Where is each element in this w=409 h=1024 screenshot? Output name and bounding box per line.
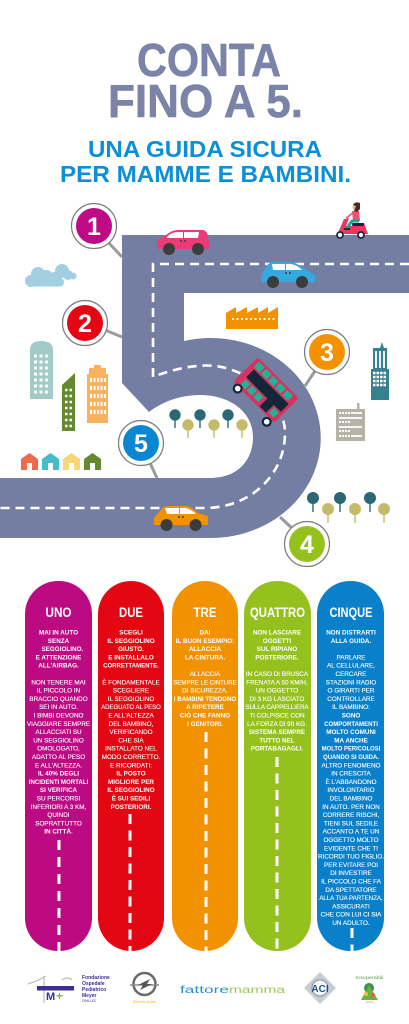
panel: cinque: AL CELLULARE, <box>327 663 375 670</box>
panel: cinque <box>317 581 384 951</box>
logo: fattoremamma: fattore <box>180 985 230 996</box>
panel: due: DEL BAMBINO, <box>109 721 154 728</box>
logo: children's charity: onlus <box>366 1000 374 1004</box>
panel: due: CHE SIA <box>118 737 144 744</box>
logo: fattoremamma <box>180 985 286 996</box>
panel: quattro: NON LASCIARE <box>253 629 302 637</box>
panel: tre: LA CINTURA. <box>185 654 225 661</box>
panel: uno: BRACCIO QUANDO <box>29 696 88 703</box>
panel: uno <box>25 581 92 951</box>
logo: fondazione meyer <box>28 975 110 1003</box>
marker 2 <box>62 300 122 346</box>
marker 5: 5 <box>134 430 148 458</box>
panel: cinque: OGGETTO MOLTO <box>323 837 379 844</box>
panel: uno: IL PICCOLO IN <box>37 687 80 695</box>
panel: quattro: FRENATA A 50 KM/H, <box>246 679 308 686</box>
panel: uno: ALLACCIATI SU <box>35 729 82 736</box>
building: teal skyscraper <box>371 342 389 400</box>
panel: quattro: IN CASO DI BRUSCA <box>246 671 309 678</box>
panel: cinque: ALTRO FENOMENO <box>322 762 380 769</box>
panel: uno: SOPRATTUTTO <box>35 820 82 827</box>
panel: uno: ADATTO AL PESO <box>32 754 85 761</box>
panel: due: VERIFICANDO <box>109 729 153 736</box>
panel: due: È FONDAMENTALE <box>102 677 160 686</box>
panel: due: POSTERIORI. <box>111 804 152 811</box>
panel: uno: OMOLOGATO, <box>37 746 80 753</box>
panel: tre: ALLACCIA <box>189 646 221 653</box>
panel: quattro: LA FORZA DI 90 KG. <box>247 721 307 728</box>
panel: quattro: TUTTO NEL <box>259 737 295 744</box>
houses <box>21 453 101 470</box>
subtitle: UNA GUIDA SICURA <box>88 136 322 162</box>
panel: quattro: POSTERIORE. <box>255 654 299 661</box>
logo: fondazione meyer: Ospedale <box>82 981 105 987</box>
title <box>108 34 303 127</box>
panel: cinque: SONO <box>342 712 360 720</box>
panel: uno: VIAGGIARE SEMPRE <box>27 721 91 728</box>
panel: uno: I BIMBI DEVONO <box>34 712 83 720</box>
panel: cinque: CINQUE <box>330 605 372 620</box>
panel: cinque: QUANDO SI GUIDA. <box>323 754 379 761</box>
subtitle: PER MAMME E BAMBINI. <box>60 161 351 187</box>
panel: due: SCEGLI <box>119 629 143 637</box>
panel: tre: A RIPETERE <box>186 704 225 711</box>
building: grey office <box>336 403 365 441</box>
panel: uno: ALL'AIRBAG. <box>38 663 79 670</box>
panel: uno: SU PERCORSI <box>37 795 80 803</box>
panel: cinque: DA SPETTATORE <box>325 887 377 894</box>
panel: cinque: DEL BAMBINO <box>330 795 372 803</box>
panel: due: CORRETTAMENTE. <box>103 663 159 670</box>
factory <box>226 307 278 329</box>
panel: uno: SEGGIOLINO. <box>41 646 83 653</box>
panel: tre: CIÒ CHE FANNO <box>180 710 230 720</box>
panel: due: IL SEGGIOLINO <box>108 696 154 703</box>
panel: uno: INCIDENTI MORTALI <box>29 779 88 786</box>
subtitle <box>60 136 351 187</box>
panel: due: IL POSTO <box>116 770 146 778</box>
panel: uno: IL 40% DEGLI <box>38 770 79 778</box>
trees on the right <box>307 492 390 523</box>
title: FINO A 5. <box>108 75 303 127</box>
panel: cinque: CORRERE RISCHI, <box>323 812 379 819</box>
panel: cinque: IN AUTO. PER NON <box>322 804 380 811</box>
logo: opel <box>130 973 159 1004</box>
marker 4: 4 <box>300 531 314 559</box>
panel: cinque: CERCARE <box>336 671 367 678</box>
panel: cinque: IL PICCOLO CHE FA <box>321 878 382 886</box>
panel: cinque: IL BAMBINO: <box>332 704 370 711</box>
scooter rider <box>337 202 368 238</box>
panel: cinque: O GIRARTI PER <box>328 687 375 695</box>
panel: uno: E ATTENZIONE <box>36 654 82 661</box>
panel: due: SCEGLIERE <box>113 687 150 695</box>
panel: cinque: IN CRESCITA <box>331 770 371 778</box>
logo: children's charity <box>356 975 384 1004</box>
marker 3: 3 <box>320 339 334 367</box>
marker 5 <box>118 420 164 478</box>
panel: quattro: SULLA CAPPELLIERA <box>245 704 309 711</box>
panel: due: IL SEGGIOLINO <box>107 787 155 794</box>
panel: cinque: MA ANCHE <box>334 737 368 744</box>
panel: quattro: TI COLPISCE CON <box>249 712 305 720</box>
logo: fondazione meyer: + <box>56 989 63 1003</box>
double-decker bus <box>226 357 299 430</box>
panel: cinque: DI INVESTIRE <box>330 870 372 877</box>
panel: due: ADEGUATO AL PESO <box>101 704 161 711</box>
logo: fattoremamma: mamma <box>229 985 286 996</box>
panel: uno: NON TENERE MAI <box>31 679 86 686</box>
panel: uno: INFERIORI A 3 KM, <box>31 804 86 811</box>
panel: due: IL SEGGIOLINO <box>107 638 155 645</box>
panel: tre: I BAMBINI TENDONO <box>174 696 236 703</box>
panel: cinque: NON DISTRARTI <box>326 629 376 637</box>
marker 4 <box>280 517 330 566</box>
panel: quattro: DI 3 KG LASCIATO <box>250 696 304 703</box>
panel: cinque: INVOLONTARIO <box>327 787 375 794</box>
panel: cinque: RICORDI TUO FIGLIO. <box>318 853 384 861</box>
panel: cinque: CONTROLLARE <box>327 696 375 703</box>
panel: quattro <box>244 581 311 951</box>
panel: tre: DAI <box>200 629 211 637</box>
panel: tre: IL BUON ESEMPIO: <box>176 638 234 645</box>
panel: due: E ALL'ALTEZZA <box>108 712 154 720</box>
panel: cinque: MOLTO PERICOLOSI <box>322 746 380 753</box>
panel: due: MODO CORRETTO. <box>102 754 160 761</box>
panel: cinque: ASSICURATI <box>332 903 370 910</box>
panel: tre <box>172 581 238 951</box>
panel: tre: TRE <box>194 605 216 620</box>
panel: due <box>98 581 164 951</box>
panel: uno: E ALL'ALTEZZA. <box>35 762 82 769</box>
panel: uno: SENZA <box>48 638 70 645</box>
panel: quattro: SISTEMA SEMPRE <box>249 729 306 736</box>
panel: tre: DI SICUREZZA. <box>182 687 228 695</box>
marker 1 <box>72 204 122 257</box>
panel: tre: SEMPRE LE CINTURE <box>173 679 237 686</box>
panel: cinque: COMPORTAMENTI <box>324 721 378 728</box>
panel: due: GIUSTO. <box>118 646 144 653</box>
marker 1: 1 <box>87 213 101 241</box>
panel: cinque: ALLA TUA PARTENZA, <box>319 895 383 902</box>
panel: uno: IN CITTÀ. <box>44 827 73 836</box>
panel: due: È SUI SEDILI <box>112 793 151 803</box>
logo: fondazione meyer: Meyer <box>82 993 97 999</box>
logo: fondazione meyer: Fondazione <box>82 975 110 981</box>
panel: due: E INSTALLALO <box>108 654 154 661</box>
road shaped like the number 5 <box>0 235 409 538</box>
trees inside the road curve <box>169 409 248 438</box>
panel: uno: MAI IN AUTO <box>39 629 78 637</box>
panel: cinque: PER EVITARE POI <box>324 862 378 869</box>
panel: cinque: MOLTO COMUNI <box>326 729 376 736</box>
panel: tre: I GENITORI. <box>187 721 223 728</box>
panel: tre: ALLACCIA <box>190 671 221 678</box>
marker 2: 2 <box>78 310 92 338</box>
logo: opel: Wir leben Autos. <box>133 1000 156 1004</box>
panel: quattro: SUL RIPIANO <box>257 646 297 653</box>
building: orange <box>87 365 108 423</box>
panel: uno: UN SEGGIOLINO <box>33 737 84 744</box>
logo: aci: ACI <box>311 984 329 995</box>
logo: children's charity: Insuperabili <box>356 975 384 980</box>
panel: uno: SEI IN AUTO. <box>39 704 78 711</box>
logo: fondazione meyer: ONLUS <box>82 998 96 1003</box>
blue car <box>261 262 315 288</box>
panel: cinque: UN ADULTO. <box>332 920 370 927</box>
panel: due: E RICORDATI: <box>110 762 152 769</box>
panel: cinque: TIENI SUL SEDILE <box>324 820 379 827</box>
building: pale teal <box>30 341 53 399</box>
panel: quattro: UN OGGETTO <box>256 687 298 695</box>
panel: quattro: QUATTRO <box>250 605 305 620</box>
panel: cinque: ACCANTO A TE UN <box>323 829 380 836</box>
panel: uno: QUINDI <box>47 812 70 819</box>
panel: cinque: STAZIONI RADIO <box>326 679 376 686</box>
panel: due: DUE <box>119 605 143 620</box>
panel: cinque: È L'ABBANDONO <box>325 777 377 786</box>
panel: due: INSTALLATO NEL <box>105 746 157 753</box>
title: CONTA <box>137 34 281 86</box>
panel: due: MIGLIORE PER <box>108 779 154 786</box>
logo: fondazione meyer: Pediatrico <box>82 987 106 993</box>
cloud <box>25 264 76 287</box>
panel: cinque: ALLA GUIDA. <box>331 638 371 645</box>
marker 3 <box>304 330 350 386</box>
panel: uno: SI VERIFICA <box>40 787 77 794</box>
logo: fondazione meyer: M <box>46 991 55 1003</box>
building: green tower <box>62 373 75 431</box>
panel: cinque: PARLARE <box>336 654 366 661</box>
panel: cinque: EVIDENTE CHE TI <box>324 845 378 852</box>
orange car <box>154 506 208 531</box>
panel: uno: UNO <box>46 605 72 620</box>
panel: quattro: OGGETTI <box>263 638 291 645</box>
panel: quattro: PORTABAGAGLI. <box>251 746 303 753</box>
panel: cinque: CHE CON LUI CI SIA <box>321 912 382 919</box>
logo: aci <box>304 972 336 1004</box>
pink car <box>157 230 210 255</box>
